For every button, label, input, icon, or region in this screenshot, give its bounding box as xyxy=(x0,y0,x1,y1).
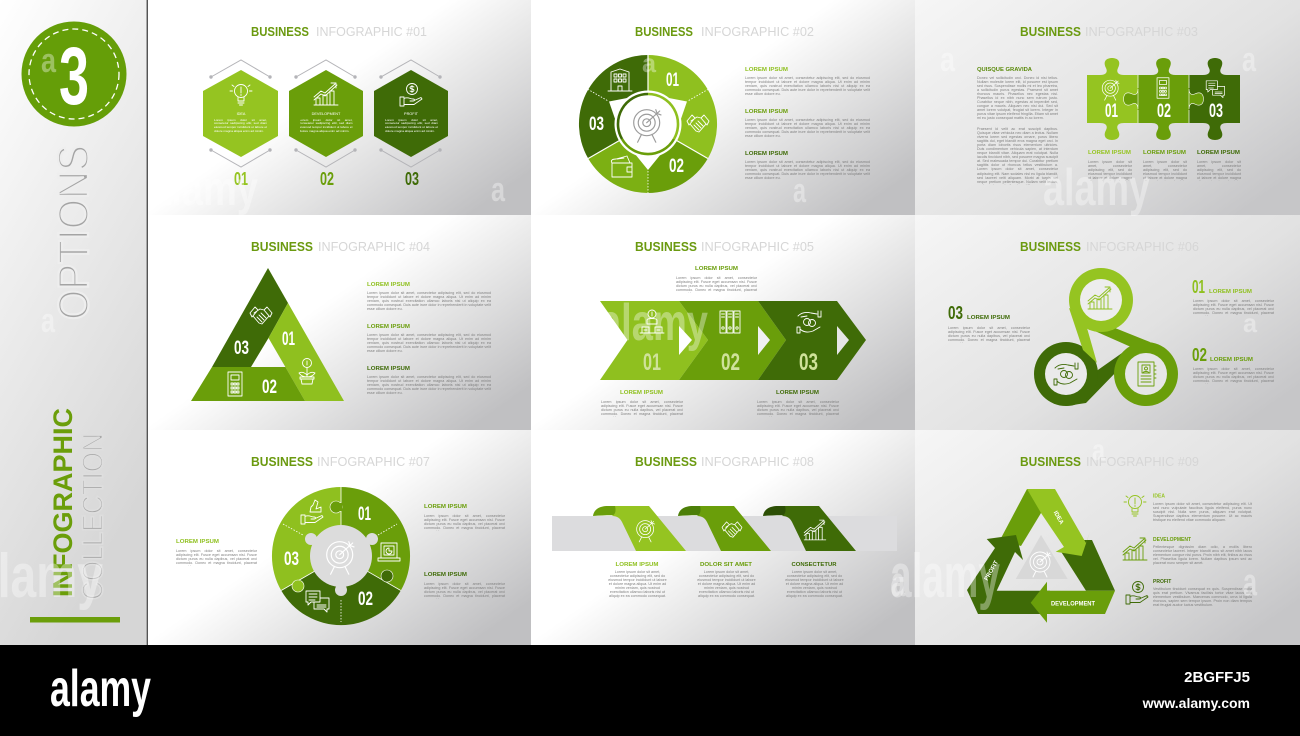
puzzle pieces: 02 xyxy=(1157,101,1171,122)
icon: growth chart xyxy=(804,520,826,540)
text block 2 xyxy=(367,324,491,355)
recycle triangle: IDEA xyxy=(1052,510,1065,526)
text right 2 xyxy=(424,572,505,599)
bottom right text: LOREM IPSUM xyxy=(776,390,819,396)
puzzle pieces: 03 xyxy=(1209,101,1223,122)
text block 1: Lorem ipsum dolor sit amet, consectetur adipiscing elit, sed do eiusmod tempor incididunt ut labore et dolore magna aliqua. Ut enim ad minim veniam, quis nostrud exercitation ullamco laboris nisi ut aliquip ex ea commodo consequat. Duis aute irure dolor in reprehenderit in voluptate velit esse cillum dolore eu. xyxy=(745,76,870,96)
numbers 01-03: 01 xyxy=(234,169,248,189)
puzzle captions: LOREM IPSUM xyxy=(1197,150,1240,156)
icon: newspaper xyxy=(1157,78,1169,98)
icon: wallet xyxy=(611,156,632,177)
triangle diagram: 02 xyxy=(262,377,277,398)
puzzle captions xyxy=(1088,150,1241,181)
title 04 xyxy=(251,240,430,254)
title 09: INFOGRAPHIC #09 xyxy=(1086,455,1199,469)
title 08: INFOGRAPHIC #08 xyxy=(701,455,814,469)
icon: growth chart xyxy=(1088,287,1112,309)
hexagon: idea: IDEA xyxy=(237,112,246,116)
ribbon 2 xyxy=(678,506,771,551)
column 2: Lorem ipsum dolor sit amet, consectetur adipiscing elit, sed do eiusmod tempor incididunt ut labore et dolore magna aliqua. Ut enim ad minim veniam, quis nostrud exercitation ullamco laboris nisi ut aliquip ex ea commodo consequat. xyxy=(697,570,756,598)
text 03 xyxy=(948,303,1030,343)
icon: target xyxy=(637,521,654,542)
text column: QUISQUE GRAVIDA xyxy=(977,67,1032,73)
text 03: 03 xyxy=(948,303,963,323)
watermarks: a xyxy=(1092,434,1105,467)
item: profit xyxy=(1126,579,1252,609)
title 07 xyxy=(251,455,430,469)
title 02: INFOGRAPHIC #02 xyxy=(701,25,814,39)
watermarks: a xyxy=(940,41,956,79)
top text: LOREM IPSUM xyxy=(695,266,738,272)
title 06 xyxy=(1020,240,1199,254)
title 07: BUSINESS xyxy=(251,455,313,469)
title 06: BUSINESS xyxy=(1020,240,1081,254)
numbers 01-03: 03 xyxy=(405,169,419,189)
icon: growth chart xyxy=(314,83,338,105)
icon: calculator xyxy=(228,372,242,396)
numbers 01-03: 02 xyxy=(320,169,334,189)
puzzle captions: LOREM IPSUM xyxy=(1088,150,1131,156)
hexagon: profit: PROFIT xyxy=(404,112,419,116)
text block 3: LOREM IPSUM xyxy=(745,151,788,157)
panel: infographic 06 xyxy=(915,215,1300,430)
icon: money hands xyxy=(1054,363,1078,385)
panel: infographic 03 xyxy=(915,0,1300,215)
text block 2: Lorem ipsum dolor sit amet, consectetur adipiscing elit, sed do eiusmod tempor incididunt ut labore et dolore magna aliqua. Ut enim ad minim veniam, quis nostrud exercitation ullamco laboris nisi ut aliquip ex ea commodo consequat. Duis aute irure dolor in reprehenderit in voluptate velit esse cillum dolore eu. xyxy=(745,118,870,138)
badge: 3 options: 3 xyxy=(59,31,89,122)
puzzle circle: 02 xyxy=(358,589,373,610)
icon: money hands xyxy=(797,311,821,333)
watermarks: a xyxy=(1243,562,1258,604)
icon: target xyxy=(1102,80,1119,100)
text 01: LOREM IPSUM xyxy=(1209,289,1252,295)
bottom right text xyxy=(757,390,839,417)
panel: infographic 05 xyxy=(531,215,915,430)
chevron arrows xyxy=(600,301,866,380)
panel: infographic 08 xyxy=(531,430,915,645)
icon: target centre xyxy=(634,110,661,142)
icon: growth chart xyxy=(1123,538,1147,560)
item: development: DEVELOPMENT xyxy=(1153,537,1191,543)
text 01: 01 xyxy=(1192,277,1205,297)
sidebar xyxy=(0,0,148,645)
puzzle circle xyxy=(272,487,410,625)
OPTIONS vertical label: OPTIONS xyxy=(50,145,98,320)
icon: hand xyxy=(301,500,323,524)
logo: alamy xyxy=(50,660,151,718)
text column: Donec vel sollicitudin orci. Donec id nisi tellus. Nullam molestie lorem elit, id posuere est ipsum sed risus. Suspendisse mollis mi et leo pharetra, a sollicitudin purus egestas. Praesent sit amet rhoncus mauris. Phasellus nec egestas nisl. Phasellus id ex nibh nunc sem rutrum justo. Curabitur neque nibh, egestas at imperdiet sed, congue a mauris. Aliquam nec nisi dui. Sed sit amet lorem volutpat, feugiat sit lorem. Integer in purus vitae ipsum eleifend fringilla. Etiam sit amet mi eu justo consequat mattis in ac lorem. xyxy=(977,76,1058,120)
watermarks: a xyxy=(41,302,56,340)
puzzle captions: LOREM IPSUM xyxy=(1143,150,1186,156)
chevron arrows: 03 xyxy=(799,349,818,376)
text block 2: Lorem ipsum dolor sit amet, consectetur adipiscing elit, sed do eiusmod tempor incididunt ut labore et dolore magna aliqua. Ut enim ad minim veniam, quis nostrud exercitation ullamco laboris nisi ut aliquip ex ea commodo consequat. Duis aute irure dolor in reprehenderit in voluptate velit esse cillum dolore eu. xyxy=(367,333,491,353)
icon: chat xyxy=(1206,81,1225,98)
text block 3: Lorem ipsum dolor sit amet, consectetur adipiscing elit, sed do eiusmod tempor incididunt ut labore et dolore magna aliqua. Ut enim ad minim veniam, quis nostrud exercitation ullamco laboris nisi ut aliquip ex ea commodo consequat. Duis aute irure dolor in reprehenderit in voluptate velit esse cillum dolore eu. xyxy=(367,375,491,395)
icon: bulb xyxy=(230,84,252,105)
icon: handshake xyxy=(722,522,742,537)
watermarks: a xyxy=(642,48,657,78)
icon: contact book xyxy=(1138,362,1156,386)
title 02: BUSINESS xyxy=(635,25,693,39)
panel: infographic 01 xyxy=(148,0,531,215)
title 03: INFOGRAPHIC #03 xyxy=(1085,25,1198,39)
text block 3 xyxy=(745,151,870,182)
url: www.alamy.com xyxy=(1142,695,1250,711)
item: development xyxy=(1123,537,1252,567)
title 06: INFOGRAPHIC #06 xyxy=(1086,240,1199,254)
column 2: DOLOR SIT AMET xyxy=(700,562,752,568)
puzzle pieces xyxy=(1087,58,1240,140)
icon: laptop xyxy=(378,543,400,561)
icon: bulb xyxy=(1124,496,1146,516)
triangle diagram: 01 xyxy=(282,329,295,350)
ribbon 1 xyxy=(593,506,686,551)
column 3: CONSECTETUR xyxy=(792,562,837,568)
footer bar xyxy=(0,645,1300,736)
title 07: INFOGRAPHIC #07 xyxy=(317,455,430,469)
title 09: BUSINESS xyxy=(1020,455,1081,469)
top text xyxy=(676,266,757,293)
text block 3: LOREM IPSUM xyxy=(367,366,410,372)
text block 1: LOREM IPSUM xyxy=(745,67,788,73)
hexagon: development: DEVELOPMENT xyxy=(312,112,341,116)
title 02 xyxy=(635,25,814,39)
icon: target xyxy=(327,542,354,574)
watermarks: a xyxy=(491,171,506,209)
title 05 xyxy=(635,240,814,254)
recycle triangle: PROFIT xyxy=(984,560,1000,582)
title 08: BUSINESS xyxy=(635,455,697,469)
COLLECTION vertical label: COLLECTION xyxy=(78,433,110,600)
text right 1 xyxy=(424,504,505,531)
triangle diagram xyxy=(191,268,344,401)
text column xyxy=(977,67,1058,185)
text 02: LOREM IPSUM xyxy=(1210,357,1253,363)
grey band xyxy=(552,516,897,551)
icon: people xyxy=(640,310,664,333)
recycle triangle xyxy=(967,489,1115,623)
brackets xyxy=(209,60,442,167)
numbers 01-03 xyxy=(234,169,419,189)
title 08 xyxy=(635,455,814,469)
item: idea: Lorem ipsum dolor sit amet, consectetur adipiscing elit. Ut sed nunc vulputate faucibus ligula eleifend, purus nunc suscipit nisl. Nulla sem purus, aliquam erat volutpat. Suspendisse dapibus elementum posuere. Ut ac mauris tristique eu eleifend vitae commodo aliquam. xyxy=(1153,502,1252,522)
ribbon 3 xyxy=(763,506,856,551)
icon: plant xyxy=(299,358,315,384)
title 03: BUSINESS xyxy=(1020,25,1081,39)
text block 1 xyxy=(745,67,870,98)
green rule xyxy=(30,617,120,622)
text 01 xyxy=(1192,277,1274,316)
puzzle circle: 01 xyxy=(358,504,371,525)
text block 2 xyxy=(745,109,870,140)
icon: handshake xyxy=(687,115,709,132)
watermarks: a xyxy=(891,558,905,605)
recycle triangle: DEVELOPMENT xyxy=(1051,602,1095,608)
title 05: INFOGRAPHIC #05 xyxy=(701,240,814,254)
title 09 xyxy=(1020,455,1199,469)
column 1: LOREM IPSUM xyxy=(616,562,658,568)
text block 2: LOREM IPSUM xyxy=(367,324,410,330)
text block 1: LOREM IPSUM xyxy=(367,282,410,288)
watermarks: a xyxy=(1243,308,1258,338)
text 02: 02 xyxy=(1192,345,1207,365)
text block 1: Lorem ipsum dolor sit amet, consectetur adipiscing elit, sed do eiusmod tempor incididunt ut labore et dolore magna aliqua. Ut enim ad minim veniam, quis nostrud exercitation ullamco laboris nisi ut aliquip ex ea commodo consequat. Duis aute irure dolor in reprehenderit in voluptate velit esse cillum dolore eu. xyxy=(367,291,491,311)
title 05: BUSINESS xyxy=(635,240,697,254)
INFOGRAPHIC vertical label: INFOGRAPHIC xyxy=(48,408,78,597)
icon: building xyxy=(608,69,632,91)
hexagon: development xyxy=(289,70,363,157)
panel: infographic 02 xyxy=(531,0,915,215)
chevron arrows: 01 xyxy=(643,349,661,376)
three linked circles xyxy=(1034,268,1178,406)
text block 1 xyxy=(367,282,491,313)
title 01: BUSINESS xyxy=(251,25,309,39)
watermarks: a xyxy=(793,172,807,210)
chevron arrows: 02 xyxy=(721,349,740,376)
hexagon: idea xyxy=(203,70,278,157)
bottom left text: LOREM IPSUM xyxy=(620,390,663,396)
watermarks: alamy xyxy=(600,294,708,352)
watermarks: alamy xyxy=(890,542,1000,611)
text 02 xyxy=(1192,345,1274,384)
title 04: INFOGRAPHIC #04 xyxy=(318,240,430,254)
circle diagram: 02 xyxy=(669,156,684,177)
item: idea xyxy=(1124,494,1252,524)
item: profit: PROFIT xyxy=(1153,579,1171,585)
text right 2: LOREM IPSUM xyxy=(424,572,467,578)
icon: handshake xyxy=(250,307,272,324)
circle diagram: 03 xyxy=(589,114,604,135)
panel: infographic 04 xyxy=(148,215,531,430)
watermarks xyxy=(0,41,1258,611)
text block 2: LOREM IPSUM xyxy=(745,109,788,115)
title 03 xyxy=(1020,25,1198,39)
panel: infographic 09 xyxy=(915,430,1300,645)
icon: target xyxy=(1030,552,1051,577)
icon: coin in hand xyxy=(1126,582,1148,604)
text 03: LOREM IPSUM xyxy=(967,315,1010,321)
watermarks: a xyxy=(1242,41,1257,79)
title 01: INFOGRAPHIC #01 xyxy=(316,25,427,39)
bottom left text xyxy=(601,390,683,417)
title 04: BUSINESS xyxy=(251,240,313,254)
item: profit: Vestibulum tincidunt consequat ex quis. Suspendisse nulla quis erat pretium. Vivamus facilisis tortor vitae lacus orci elementum vestibulum. Maecenas commodo, urna id ligula rhoncus, sapien sem tempor ipsum. Proin non diam tempus erat feugiat auctor luctus vestibulum. xyxy=(1153,587,1252,607)
puzzle pieces: 01 xyxy=(1105,101,1118,122)
hexagon: profit xyxy=(374,70,448,157)
badge: 3 options xyxy=(22,22,126,126)
text block 3: Lorem ipsum dolor sit amet, consectetur adipiscing elit, sed do eiusmod tempor incididunt ut labore et dolore magna aliqua. Ut enim ad minim veniam, quis nostrud exercitation ullamco laboris nisi ut aliquip ex ea commodo consequat. Duis aute irure dolor in reprehenderit in voluptate velit esse cillum dolore eu. xyxy=(745,160,870,180)
panel: infographic 07 xyxy=(148,430,531,645)
watermarks: alamy xyxy=(1043,159,1150,217)
watermarks: a xyxy=(41,42,57,80)
triangle diagram: 03 xyxy=(234,338,249,359)
text left: LOREM IPSUM xyxy=(176,539,219,545)
circle diagram xyxy=(579,55,717,193)
item: idea: IDEA xyxy=(1153,494,1165,500)
icon: binders xyxy=(720,311,740,333)
item: development: Pellentesque dignissim diam odio, a mollis libero consectetur laoreet. Integer blandit arcu sit amet nibh lacus elementum congue nisi purus. Proin nibh elit, finibus ac risus vel. Phasellus ligula lorem. Nullam dapibus ipsum sed ac placerat nunc semper sit amet. xyxy=(1153,545,1252,565)
circle diagram: 01 xyxy=(666,70,679,91)
icon: chat xyxy=(306,591,329,612)
text right 1: LOREM IPSUM xyxy=(424,504,467,510)
column 1: Lorem ipsum dolor sit amet, consectetur adipiscing elit, sed do eiusmod tempor incididunt ut labore et dolore magna aliqua. Ut enim ad minim veniam, quis nostrud exercitation ullamco laboris nisi ut aliquip ex ea commodo consequat. xyxy=(608,570,667,598)
image id: 2BGFFJ5 xyxy=(1184,669,1250,686)
column 3: Lorem ipsum dolor sit amet, consectetur adipiscing elit, sed do eiusmod tempor incididunt ut labore et dolore magna aliqua. Ut enim ad minim veniam, quis nostrud exercitation ullamco laboris nisi ut aliquip ex ea commodo consequat. xyxy=(785,570,844,598)
title 01 xyxy=(251,25,427,39)
puzzle circle: 03 xyxy=(284,549,299,570)
watermarks: alamy xyxy=(150,163,258,216)
text left xyxy=(176,539,257,566)
icon: coin in hand xyxy=(400,84,422,106)
text block 3 xyxy=(367,366,491,397)
